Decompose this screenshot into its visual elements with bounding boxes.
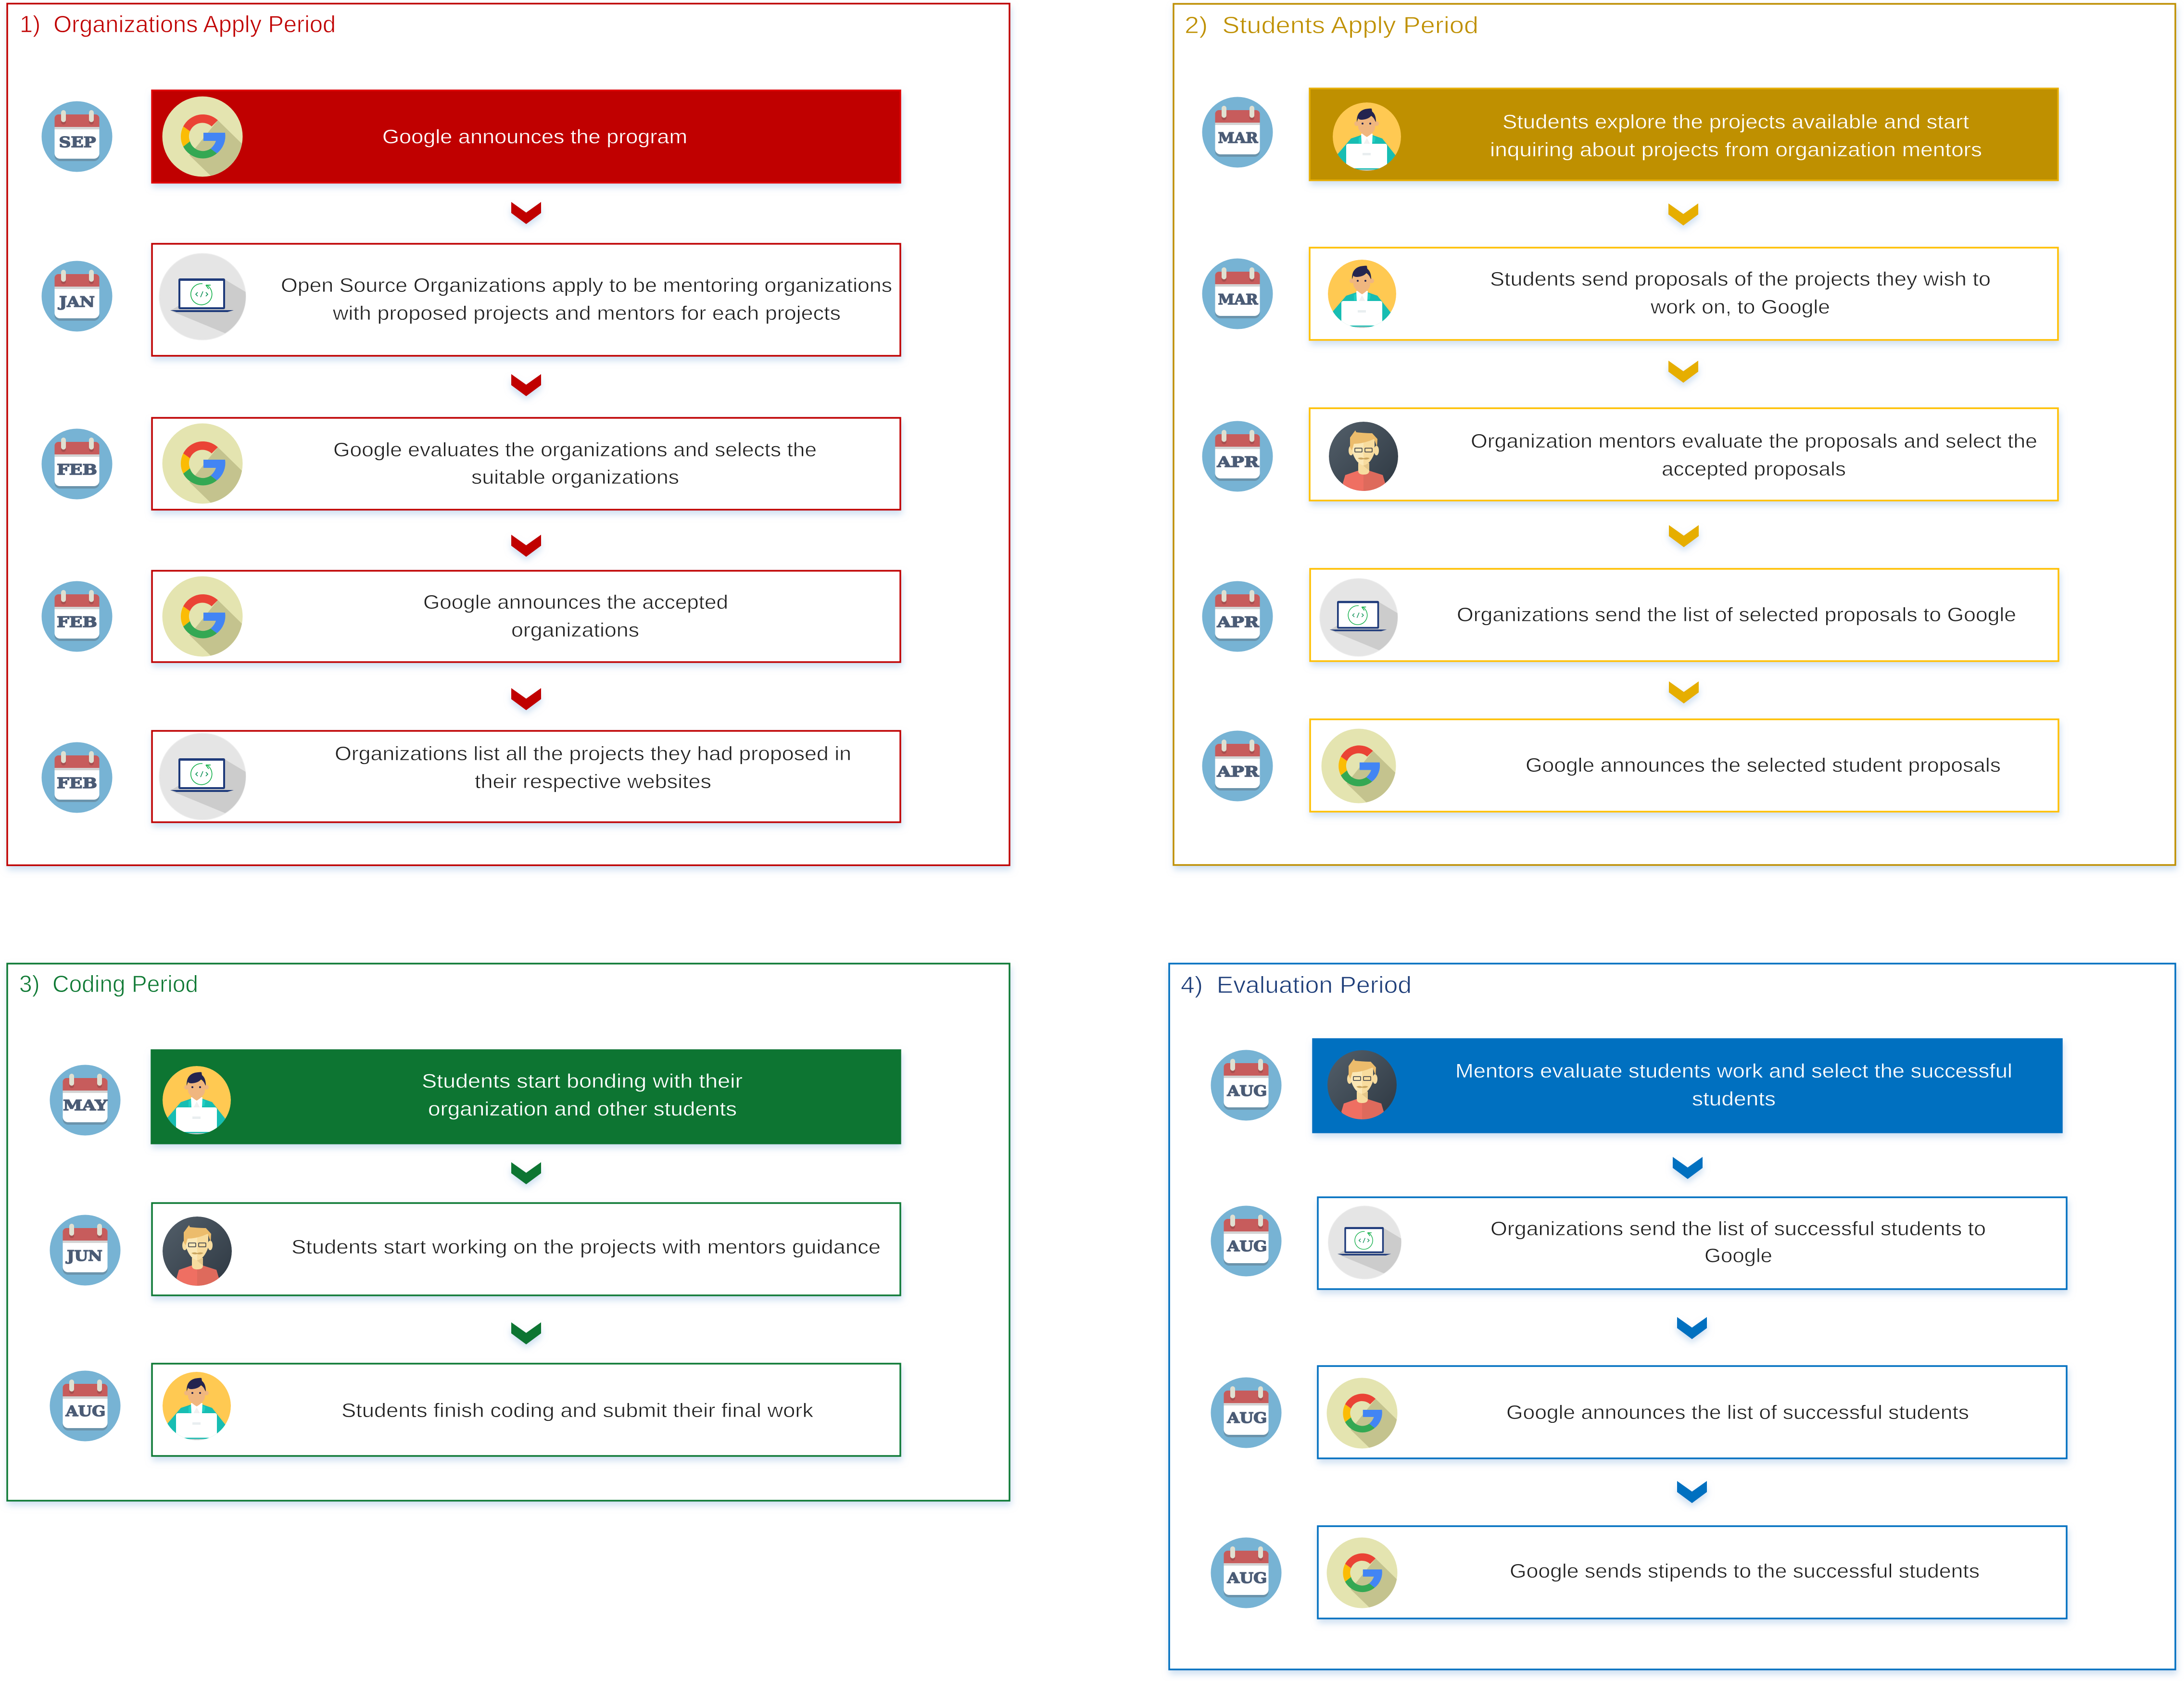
box: mentors evaluate proposals: Organization mentors evaluate the proposals and select the	[1471, 430, 2037, 452]
panel 2 heading: 2) Students Apply Period	[1185, 13, 1478, 38]
box: organizations send list of successful students: Google	[1704, 1244, 1772, 1267]
box: Google sends stipends: Google sends stipends to the successful students	[1510, 1560, 1980, 1582]
panel: 3 Coding Period	[7, 964, 1010, 1501]
calendar icon: AUG: AUG	[1226, 1570, 1267, 1587]
panel 3 heading: 3) Coding Period	[19, 971, 198, 997]
calendar icon: MAY: MAY	[63, 1097, 108, 1114]
highlighted box: Google announces the program: Google announces the program	[382, 125, 687, 148]
step: April, mentors evaluate proposals	[1202, 408, 2058, 501]
calendar icon: APR	[1202, 731, 1273, 801]
panel: 4 Evaluation Period	[1169, 964, 2175, 1669]
box: students send proposals: work on, to Google	[1650, 296, 1830, 318]
panel 1 heading: 1) Organizations Apply Period	[20, 12, 336, 38]
calendar icon: MAR: MAR	[1218, 130, 1259, 147]
calendar icon: AUG	[1211, 1538, 1281, 1608]
highlighted box: bonding	[151, 1050, 900, 1143]
panel 4 frame	[1169, 964, 2175, 1669]
step: August, Google sends stipends	[1211, 1526, 2067, 1618]
step: June, start working	[50, 1203, 900, 1295]
calendar icon: FEB	[41, 429, 113, 499]
box: Google evaluates: Google evaluates the organizations and selects the	[333, 439, 817, 461]
calendar icon: JUN	[50, 1215, 120, 1286]
highlighted box: students explore: inquiring about projects from organization mentors	[1490, 138, 1982, 161]
calendar icon: AUG	[1211, 1206, 1281, 1276]
calendar icon: MAR	[1202, 97, 1273, 167]
arrow: down chevron	[1669, 525, 1699, 547]
arrow: down chevron	[1669, 681, 1699, 703]
box: finish coding: Students finish coding and submit their final work	[341, 1399, 814, 1421]
box: organizations send list: Organizations send the list of selected proposals to Google	[1457, 603, 2016, 626]
calendar icon: FEB	[41, 742, 113, 813]
calendar icon: FEB: FEB	[57, 462, 97, 478]
arrow: down chevron	[511, 374, 541, 396]
box: organizations apply: Open Source Organizations apply to be mentoring organizations	[281, 274, 892, 296]
calendar icon: AUG: AUG	[65, 1403, 106, 1420]
highlighted box: mentors evaluate work: students	[1692, 1088, 1776, 1110]
arrow: down chevron	[511, 1162, 541, 1184]
arrow: down chevron	[511, 202, 541, 224]
calendar icon: APR	[1202, 421, 1273, 491]
highlighted box: Google announces the program	[152, 90, 900, 183]
box: organizations apply: with proposed projects and mentors for each projects	[332, 302, 841, 324]
box: Google evaluates	[152, 418, 900, 510]
arrow: down chevron	[1677, 1481, 1707, 1503]
box: mentors evaluate proposals	[1310, 408, 2058, 501]
box: start working: Students start working on the projects with mentors guidance	[291, 1236, 881, 1258]
step: September, Google announces the program	[41, 90, 900, 183]
calendar icon: APR: APR	[1216, 614, 1260, 631]
box: organizations send list of successful students: Organizations send the list of successful students to	[1490, 1217, 1986, 1240]
highlighted box: students explore: Students explore the projects available and start	[1502, 111, 1969, 133]
panel 2 frame	[1174, 4, 2175, 865]
panel 4 heading: 4) Evaluation Period	[1181, 972, 1412, 998]
box: organizations send list	[1310, 569, 2058, 661]
calendar icon: AUG	[50, 1370, 120, 1442]
highlighted box: students explore	[1310, 88, 2058, 180]
highlighted box: mentors evaluate work: Mentors evaluate students work and select the successful	[1455, 1060, 2012, 1082]
step: August, finish coding	[50, 1364, 900, 1456]
step: April, Google announces proposals	[1202, 719, 2058, 812]
calendar icon: JUN: JUN	[65, 1248, 102, 1265]
calendar icon: AUG: AUG	[1226, 1083, 1267, 1100]
box: students send proposals: Students send proposals of the projects they wish to	[1490, 268, 1991, 290]
highlighted box: bonding: Students start bonding with their	[422, 1070, 743, 1092]
step: August, Google announces list	[1211, 1366, 2067, 1458]
step: January, organizations apply	[41, 244, 900, 356]
calendar icon: AUG	[1211, 1050, 1281, 1120]
box: Google sends stipends	[1318, 1526, 2067, 1618]
arrow: down chevron	[511, 1322, 541, 1344]
calendar icon: JAN: JAN	[58, 294, 95, 311]
panel: 2 Students Apply Period	[1174, 4, 2175, 865]
calendar icon: SEP	[41, 101, 113, 172]
box: organizations list projects	[152, 731, 900, 822]
box: mentors evaluate proposals: accepted proposals	[1662, 458, 1846, 480]
step: May, bonding	[50, 1050, 900, 1143]
calendar icon: FEB: FEB	[57, 775, 97, 792]
step: April, organizations send list	[1202, 569, 2058, 661]
step: February, organizations list projects	[41, 731, 900, 822]
box: Google announces selected proposals	[1310, 719, 2058, 812]
arrow: down chevron	[1673, 1157, 1703, 1179]
calendar icon: APR	[1202, 581, 1273, 652]
box: students send proposals	[1310, 248, 2058, 340]
step: August, organizations send list	[1211, 1197, 2067, 1289]
calendar icon: AUG: AUG	[1226, 1238, 1267, 1255]
step: February, Google announces organizations	[41, 571, 900, 662]
highlighted box: mentors evaluate work	[1313, 1039, 2062, 1132]
panel: 1 Organizations Apply Period	[7, 4, 1010, 866]
box: finish coding	[152, 1364, 900, 1456]
calendar icon: JAN	[41, 261, 113, 332]
box: Google announces accepted organizations: Google announces the accepted	[423, 591, 728, 613]
calendar icon: AUG: AUG	[1226, 1410, 1267, 1427]
arrow: down chevron	[511, 535, 541, 557]
arrow: down chevron	[1668, 203, 1698, 226]
box: Google announces accepted organizations: organizations	[511, 619, 639, 641]
box: organizations send list of successful students	[1318, 1197, 2067, 1289]
panel 3 frame	[7, 964, 1010, 1501]
panel 1 frame	[7, 4, 1010, 866]
calendar icon: APR: APR	[1216, 454, 1260, 471]
box: Google announces list: Google announces the list of successful students	[1506, 1401, 1969, 1423]
calendar icon: FEB	[41, 581, 113, 652]
box: Google announces accepted organizations	[152, 571, 900, 662]
box: Google evaluates: suitable organizations	[471, 466, 679, 488]
step: February, Google evaluates	[41, 418, 900, 510]
calendar icon: AUG	[1211, 1377, 1281, 1448]
arrow: down chevron	[511, 688, 541, 710]
highlighted box: bonding: organization and other students	[428, 1098, 737, 1120]
step: March, students explore	[1202, 88, 2058, 180]
step: March, students send proposals	[1202, 248, 2058, 340]
calendar icon: APR: APR	[1216, 764, 1260, 780]
box: organizations apply	[152, 244, 900, 356]
box: organizations list projects: Organizations list all the projects they had proposed in	[335, 742, 851, 765]
calendar icon: SEP: SEP	[59, 134, 96, 151]
calendar icon: FEB: FEB	[57, 614, 97, 631]
calendar icon: MAY	[50, 1065, 120, 1136]
arrow: down chevron	[1677, 1317, 1707, 1339]
box: start working	[152, 1203, 900, 1295]
step: August, mentors evaluate work	[1211, 1039, 2062, 1132]
arrow: down chevron	[1668, 361, 1698, 383]
calendar icon: MAR: MAR	[1218, 291, 1259, 308]
calendar icon: MAR	[1202, 259, 1273, 329]
box: Google announces selected proposals: Google announces the selected student proposals	[1526, 754, 2001, 776]
box: Google announces list	[1318, 1366, 2067, 1458]
box: organizations list projects: their respective websites	[475, 770, 711, 792]
